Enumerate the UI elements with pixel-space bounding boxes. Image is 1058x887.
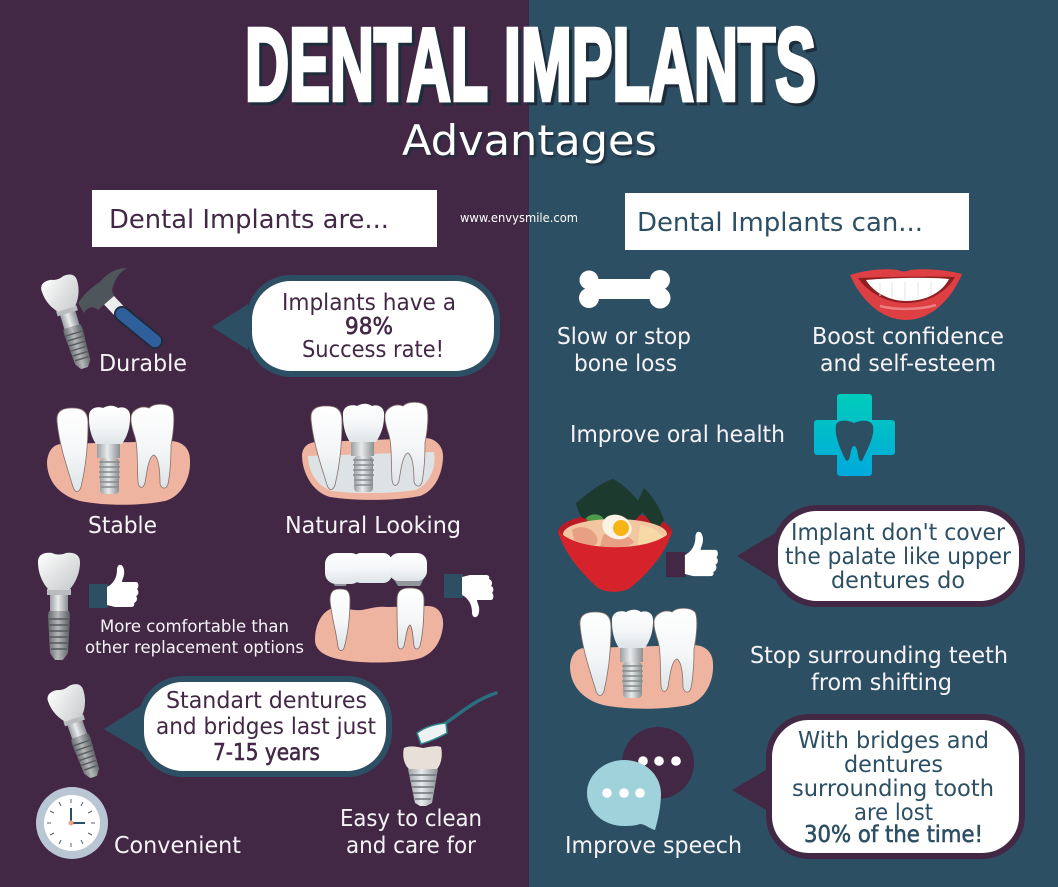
website url: www.envysmile.com: [460, 211, 578, 225]
callout: surrounding tooth lost 30 percent of the time: are lost: [854, 800, 933, 826]
label: Easy to clean and care for: [340, 806, 482, 859]
text: more comfortable: [85, 617, 304, 658]
callout: implants do not cover the palate: the palate like upper: [785, 544, 1012, 570]
label: Stop surrounding teeth from shifting: Stop surrounding teeth: [750, 643, 1008, 669]
icon: bone: [579, 270, 670, 308]
icon: implant and hammer: [39, 268, 155, 373]
callout: implants do not cover the palate: [737, 508, 1022, 604]
callout: dentures last 7-15 years: Standart dentures: [166, 688, 367, 714]
illustration: implant in gum and bone, natural looking: [302, 402, 443, 500]
text: more comfortable: other replacement options: [85, 638, 304, 658]
label: Improve oral health: Improve oral health: [570, 422, 785, 448]
label: Stable: Stable: [88, 513, 157, 539]
label: Improve speech: Improve speech: [565, 833, 742, 859]
label: Natural Looking: Natural Looking: [285, 513, 461, 539]
label: Boost confidence and self-esteem: and self-esteem: [820, 351, 996, 377]
icon: smiling lips: [850, 269, 962, 320]
text: more comfortable: More comfortable than: [100, 617, 289, 637]
icon: ramen bowl: [558, 479, 672, 592]
callout: 98 percent success rate: Implants have a: [282, 290, 456, 316]
callout: dentures last 7-15 years: and bridges last just: [156, 714, 376, 740]
label: Slow or stop bone loss: [557, 324, 691, 377]
callout: surrounding tooth lost 30 percent of the time: [732, 717, 1022, 856]
icon: toothbrush and implant: [403, 693, 496, 806]
callout: dentures last 7-15 years: 7-15 years: [213, 740, 320, 766]
label: Durable: Durable: [99, 351, 187, 377]
subtitle: Advantages: Advantages: [402, 116, 657, 165]
callout: implants do not cover the palate: dentures do: [831, 568, 965, 594]
icon: thumbs down: [444, 574, 493, 617]
icon: tilted implant: [45, 682, 111, 783]
heading box: Dental Implants are: [92, 190, 437, 247]
callout: surrounding tooth lost 30 percent of the time: 30% of the time!: [804, 822, 983, 848]
label: Boost confidence and self-esteem: Boost confidence: [812, 324, 1004, 350]
callout: surrounding tooth lost 30 percent of the time: surrounding tooth: [792, 776, 994, 802]
illustration: dental bridge: [315, 553, 443, 663]
icon: thumbs up: [89, 565, 138, 608]
label: Slow or stop bone loss: Slow or stop: [557, 324, 691, 350]
label: Easy to clean and care for: and care for: [346, 833, 477, 859]
callout: implants do not cover the palate: Implant don't cover: [791, 520, 1006, 546]
icon: medical cross with tooth: [814, 394, 895, 476]
label: Boost confidence and self-esteem: [812, 324, 1004, 377]
callout: 98 percent success rate: 98%: [345, 314, 393, 340]
callout: dentures last 7-15 years: [104, 679, 389, 774]
label: Convenient: Convenient: [114, 833, 241, 859]
illustration: implant preventing shifting: [570, 608, 713, 709]
callout: surrounding tooth lost 30 percent of the time: dentures: [844, 752, 943, 778]
panel: right background and what dental implants can do: [529, 0, 1058, 887]
label: Stop surrounding teeth from shifting: from shifting: [811, 670, 952, 696]
icon: clock: [36, 787, 108, 859]
heading box: Dental Implants can: [625, 193, 969, 250]
icon: speech bubbles: [587, 727, 694, 830]
icon: thumbs up on ramen: [666, 532, 718, 577]
heading box: Dental Implants can: Dental Implants can...: [637, 208, 923, 238]
heading box: Dental Implants are: Dental Implants are...: [109, 205, 389, 235]
label: Slow or stop bone loss: bone loss: [574, 351, 677, 377]
label: Stop surrounding teeth from shifting: [750, 643, 1008, 696]
panel: left background and advantages of dental implants: [0, 0, 529, 887]
callout: surrounding tooth lost 30 percent of the time: With bridges and: [798, 728, 989, 754]
callout: 98 percent success rate: [212, 278, 497, 374]
icon: upright implant: [38, 553, 80, 660]
illustration: implant in gum, stable: [47, 404, 190, 505]
callout: 98 percent success rate: Success rate!: [302, 337, 444, 363]
label: Easy to clean and care for: Easy to clean: [340, 806, 482, 832]
